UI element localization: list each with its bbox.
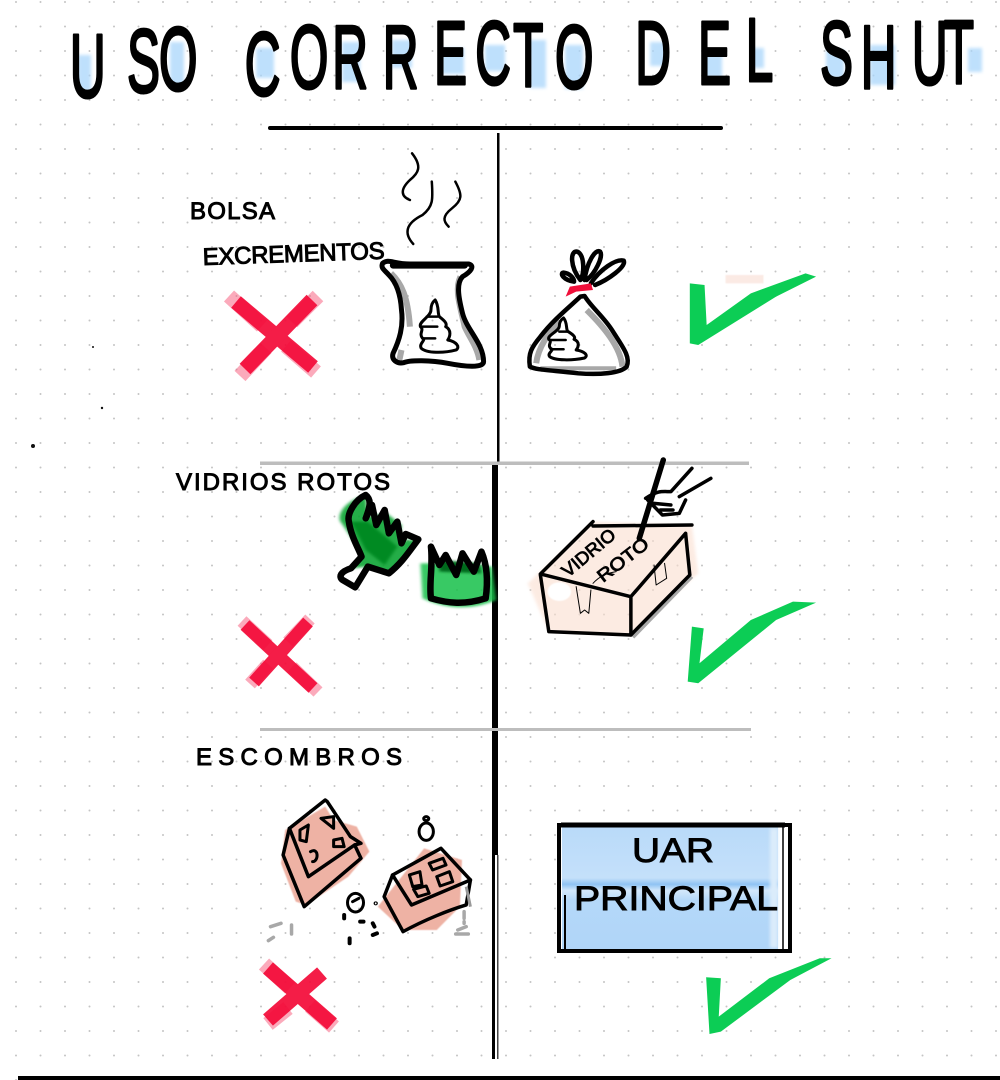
- label: vidrios rotos: VIDRIOS ROTOS: [176, 469, 390, 496]
- icon: green check: [690, 273, 816, 345]
- icon: red cross: [229, 296, 318, 376]
- icon: sealed box labelled vidrio roto: VIDRIO: [558, 525, 620, 581]
- panel: uar principal: [559, 825, 790, 951]
- icon: sealed box labelled vidrio roto: [528, 522, 698, 637]
- label: escombros: ESCOMBROS: [196, 744, 402, 771]
- icon: red cross: [242, 619, 318, 692]
- top rule: [268, 126, 723, 130]
- icon: broken glass base: [420, 547, 496, 607]
- label: bolsa excrementos: BOLSA: [190, 198, 275, 225]
- icon: red cross: [264, 964, 334, 1027]
- icon: green check: [706, 958, 832, 1034]
- stray ink dots: [31, 346, 103, 448]
- panel: uar principal: UAR: [632, 832, 714, 870]
- label: bolsa excrementos: EXCREMENTOS: [202, 238, 385, 271]
- panel: uar principal: PRINCIPAL: [574, 880, 778, 918]
- row 2: vidrios rotos: [176, 460, 816, 692]
- icon: sealed box labelled vidrio roto: ROTO: [593, 533, 653, 586]
- row 3: escombros: [196, 744, 832, 1034]
- icon: tied bag with excrement: [529, 251, 628, 374]
- title highlight: blue marker: [78, 40, 982, 91]
- icon: smell lines: [403, 153, 460, 244]
- title: USOCORRECTODELSHUT: [70, 0, 974, 117]
- icon: green check: [688, 602, 816, 683]
- row 1: bolsa excrementos: [190, 153, 816, 376]
- icon: broken brick left: [281, 800, 369, 907]
- icon: open bag with excrement: [382, 261, 484, 366]
- icon: hand with cutter: [639, 460, 711, 538]
- icon: rubble debris: [268, 817, 468, 943]
- label: bolsa excrementos: [190, 198, 385, 271]
- icon: broken brick right: [378, 848, 470, 932]
- icon: broken bottle: [340, 495, 418, 587]
- central divider: [492, 133, 500, 1059]
